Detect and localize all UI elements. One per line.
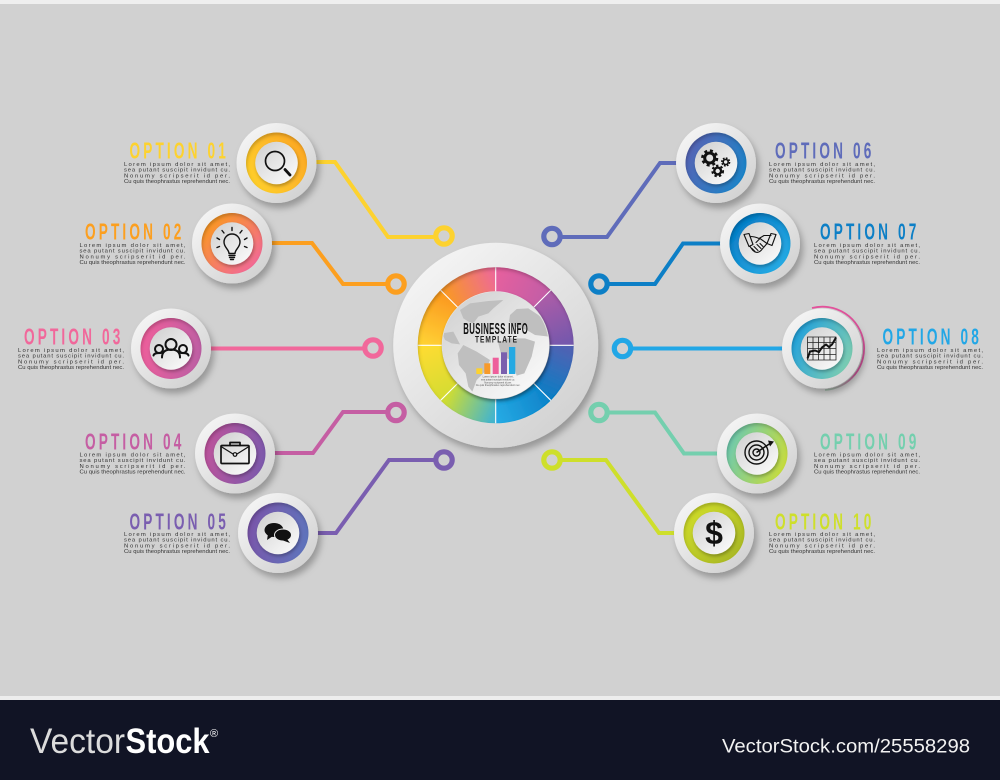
footer logo: Stock bbox=[126, 722, 210, 761]
label 05 bbox=[124, 510, 230, 555]
hub caption: Lorem ipsum dolor sit amet, bbox=[483, 376, 514, 378]
label 09: sea putant suscipit invidunt cu. bbox=[814, 458, 920, 464]
label 05: Nonumy scripserit id per. bbox=[124, 543, 230, 549]
connector 03 bbox=[209, 340, 381, 356]
hub outer ring bbox=[393, 243, 598, 448]
label 01: Lorem ipsum dolor sit amet, bbox=[124, 162, 230, 168]
option 03 bbox=[18, 308, 381, 388]
icon: line chart grid bbox=[808, 337, 836, 360]
label 09: Nonumy scripserit id per. bbox=[814, 464, 920, 470]
connector 04 bbox=[273, 404, 404, 453]
hub title: TEMPLATE bbox=[475, 334, 517, 345]
option 04 bbox=[80, 404, 404, 494]
label 02: Lorem ipsum dolor sit amet, bbox=[80, 243, 186, 249]
badge 04 bbox=[195, 414, 275, 494]
connector 10 bbox=[544, 452, 675, 533]
option 02 bbox=[80, 204, 404, 292]
label 05: OPTION 05 bbox=[130, 510, 226, 535]
badge 03 bbox=[131, 308, 211, 388]
label 03: Lorem ipsum dolor sit amet, bbox=[18, 348, 124, 354]
icon: dollar: $ bbox=[705, 515, 723, 551]
label 06: OPTION 06 bbox=[775, 139, 871, 164]
label 08 bbox=[877, 325, 983, 371]
connector 05 bbox=[317, 452, 452, 533]
label 04: Cu quis theophrastus reprehendunt nec. bbox=[80, 470, 186, 476]
badge 05 bbox=[238, 493, 318, 573]
hub caption: Nonumy scripserit id per. bbox=[484, 381, 512, 384]
label 04: sea putant suscipit invidunt cu. bbox=[80, 458, 186, 464]
mini bar chart bbox=[476, 347, 515, 374]
central hub bbox=[393, 243, 598, 448]
option 05 bbox=[124, 452, 452, 573]
label 08: Lorem ipsum dolor sit amet, bbox=[877, 348, 983, 354]
label 08: OPTION 08 bbox=[882, 325, 979, 350]
label 05: Cu quis theophrastus reprehendunt nec. bbox=[124, 549, 230, 555]
icon: gears bbox=[702, 151, 730, 176]
label 10: Cu quis theophrastus reprehendunt nec. bbox=[769, 549, 875, 555]
hub caption bbox=[476, 376, 521, 387]
label 06: Cu quis theophrastus reprehendunt nec. bbox=[769, 179, 875, 185]
icon: handshake bbox=[744, 234, 776, 252]
hub rainbow donut bbox=[418, 267, 574, 423]
label 10: Nonumy scripserit id per. bbox=[769, 543, 875, 549]
icon: light bulb bbox=[217, 228, 247, 260]
label 10 bbox=[769, 510, 875, 555]
badge 09 bbox=[717, 414, 797, 494]
icon: speech bubbles bbox=[264, 523, 292, 543]
label 10: Lorem ipsum dolor sit amet, bbox=[769, 532, 875, 538]
label 04: Nonumy scripserit id per. bbox=[80, 464, 186, 470]
badge 01 bbox=[236, 123, 316, 203]
label 07: OPTION 07 bbox=[820, 220, 916, 245]
label 06 bbox=[769, 139, 875, 185]
label 03: sea putant suscipit invidunt cu. bbox=[18, 354, 124, 360]
label 06: Nonumy scripserit id per. bbox=[769, 173, 875, 179]
footer logo bbox=[30, 722, 218, 761]
label 07: sea putant suscipit invidunt cu. bbox=[814, 249, 920, 255]
badge 02 bbox=[192, 204, 272, 284]
label 07 bbox=[814, 220, 920, 266]
label 07: Cu quis theophrastus reprehendunt nec. bbox=[814, 260, 920, 266]
connector 01 bbox=[315, 162, 452, 244]
hub centre disc bbox=[442, 292, 549, 399]
connector 02 bbox=[271, 243, 404, 292]
label 04: OPTION 04 bbox=[85, 430, 182, 455]
label 03: Nonumy scripserit id per. bbox=[18, 359, 124, 365]
icon: briefcase bbox=[221, 442, 249, 464]
hub caption: Cu quis theophrastus reprehendunt nec. bbox=[476, 384, 521, 387]
label 04 bbox=[80, 430, 186, 476]
label 01: Nonumy scripserit id per. bbox=[124, 173, 230, 179]
label 02: Cu quis theophrastus reprehendunt nec. bbox=[80, 260, 186, 266]
label 02: OPTION 02 bbox=[85, 220, 181, 245]
label 01: sea putant suscipit invidunt cu. bbox=[124, 168, 230, 174]
option 08 bbox=[614, 307, 983, 390]
footer logo: Vector bbox=[30, 722, 125, 761]
connector 06 bbox=[544, 163, 677, 245]
badge 06 bbox=[676, 123, 756, 203]
connector 09 bbox=[591, 404, 719, 454]
label 09: OPTION 09 bbox=[820, 430, 916, 455]
hub caption: sea putant suscipit invidunt cu. bbox=[481, 378, 515, 382]
hub title: BUSINESS INFO bbox=[463, 320, 528, 338]
label 09: Cu quis theophrastus reprehendunt nec. bbox=[814, 470, 920, 476]
label 05: sea putant suscipit invidunt cu. bbox=[124, 538, 230, 544]
footer image id: VectorStock.com/25558298 bbox=[722, 736, 970, 758]
badge 10 bbox=[674, 493, 754, 573]
footer logo: ® bbox=[210, 728, 218, 740]
connector 08 bbox=[614, 340, 783, 357]
label 01: Cu quis theophrastus reprehendunt nec. bbox=[124, 179, 230, 185]
label 06: Lorem ipsum dolor sit amet, bbox=[769, 162, 875, 168]
label 02: sea putant suscipit invidunt cu. bbox=[80, 249, 186, 255]
label 03: OPTION 03 bbox=[24, 325, 120, 350]
label 05: Lorem ipsum dolor sit amet, bbox=[124, 532, 230, 538]
option 10 bbox=[544, 452, 875, 573]
label 06: sea putant suscipit invidunt cu. bbox=[769, 168, 875, 174]
label 04: Lorem ipsum dolor sit amet, bbox=[80, 452, 186, 458]
label 08: Cu quis theophrastus reprehendunt nec. bbox=[877, 365, 983, 371]
label 03: Cu quis theophrastus reprehendunt nec. bbox=[18, 365, 124, 371]
badge 08 bbox=[782, 307, 864, 390]
label 08: Nonumy scripserit id per. bbox=[877, 359, 983, 365]
label 01: OPTION 01 bbox=[130, 139, 226, 164]
world map bbox=[442, 300, 549, 392]
icon: target bbox=[745, 440, 774, 464]
footer bar bbox=[0, 700, 1000, 780]
label 02 bbox=[80, 220, 186, 266]
connector 07 bbox=[591, 244, 722, 292]
icon: people bbox=[154, 339, 188, 358]
label 07: Nonumy scripserit id per. bbox=[814, 254, 920, 260]
label 03 bbox=[18, 325, 124, 371]
label 01 bbox=[124, 139, 230, 185]
option 09 bbox=[591, 404, 920, 494]
label 02: Nonumy scripserit id per. bbox=[80, 254, 186, 260]
option 06 bbox=[544, 123, 875, 245]
label 07: Lorem ipsum dolor sit amet, bbox=[814, 243, 920, 249]
label 09: Lorem ipsum dolor sit amet, bbox=[814, 452, 920, 458]
label 10: OPTION 10 bbox=[775, 510, 871, 535]
icon: magnifier bbox=[266, 152, 290, 175]
label 10: sea putant suscipit invidunt cu. bbox=[769, 538, 875, 544]
option 07 bbox=[591, 204, 920, 292]
label 08: sea putant suscipit invidunt cu. bbox=[877, 354, 983, 360]
badge 07 bbox=[720, 204, 800, 284]
option 01 bbox=[124, 123, 452, 244]
label 09 bbox=[814, 430, 920, 476]
